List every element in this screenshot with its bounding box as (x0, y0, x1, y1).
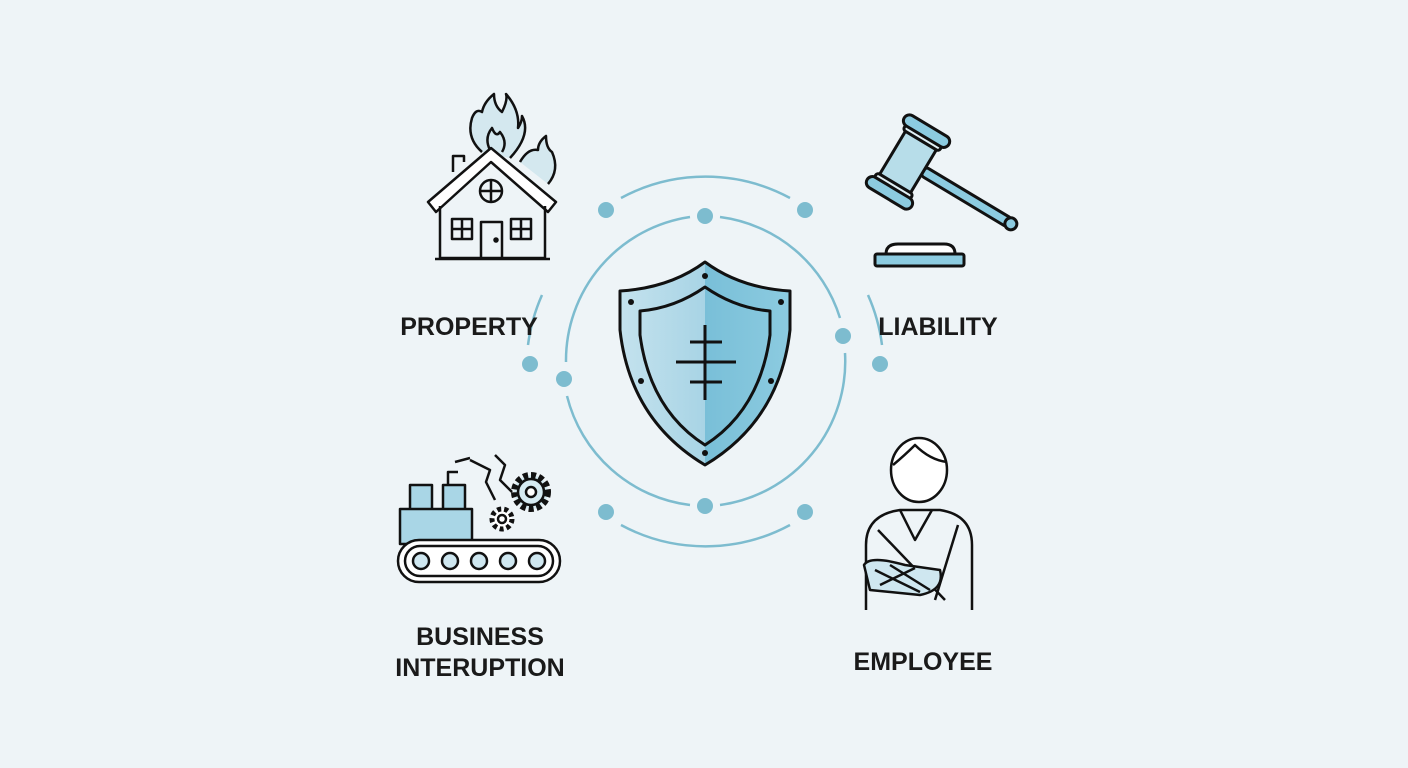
label: property: PROPERTY (400, 313, 538, 341)
label: business interuption (395, 623, 565, 682)
label: employee: EMPLOYEE (854, 648, 992, 676)
label: liability: LIABILITY (878, 313, 998, 341)
icon: burning house (428, 94, 556, 259)
icon: shield (620, 262, 790, 465)
ring: outer and inner circles with dots (522, 177, 888, 546)
icon: gavel (864, 113, 1038, 266)
icon: injured employee (864, 438, 972, 610)
icon: factory conveyor (398, 455, 560, 582)
label: business interuption: INTERUPTION (395, 654, 565, 682)
label: business interuption: BUSINESS (416, 623, 544, 651)
